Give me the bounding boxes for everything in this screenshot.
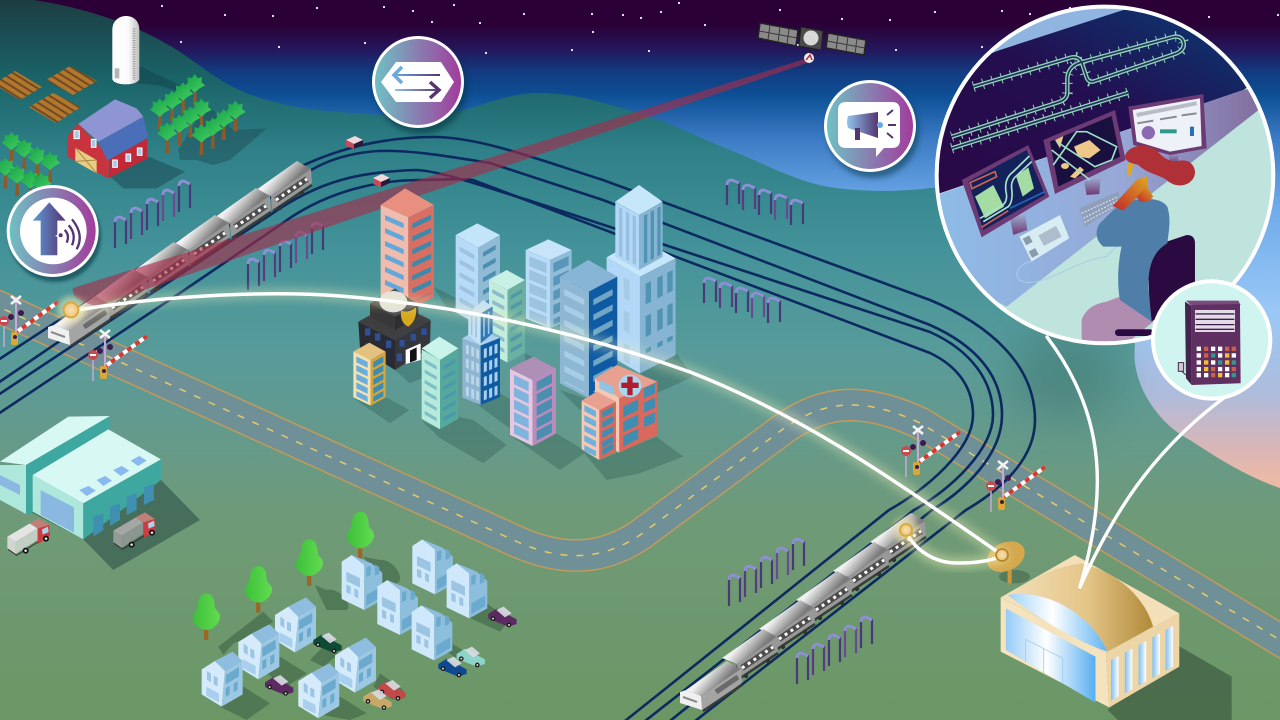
floor plane bbox=[1007, 306, 1008, 307]
monitor: centre bbox=[1043, 110, 1126, 194]
magnifier ring bbox=[937, 7, 1273, 343]
police station bbox=[358, 288, 431, 370]
building: mint front tower bbox=[422, 337, 458, 429]
building: small blue tower bbox=[462, 300, 500, 405]
warehouse front unit bbox=[33, 429, 161, 539]
building: large blue block bbox=[560, 260, 617, 398]
building: pale blue block bbox=[526, 239, 572, 328]
wall track diagram bbox=[952, 37, 1184, 148]
icon: data exchange badge bbox=[372, 36, 467, 134]
building: yellow tower bbox=[353, 343, 386, 406]
upper train bbox=[48, 161, 312, 346]
icon: satellite bbox=[758, 23, 866, 63]
wall panel bbox=[938, 10, 1247, 194]
building body bbox=[1001, 555, 1179, 707]
control room magnifier bbox=[930, 0, 1280, 399]
farm fields bbox=[0, 66, 97, 123]
icon: upload signal badge bbox=[7, 185, 101, 282]
level crossings bbox=[0, 296, 1045, 512]
rail cars in distance bbox=[346, 136, 390, 187]
rail tracks bbox=[0, 137, 1035, 720]
truck: white bbox=[7, 518, 50, 555]
room floor bbox=[940, 88, 1262, 322]
icon: silo bbox=[112, 16, 139, 84]
warehouse with trucks bbox=[0, 416, 200, 570]
barn bbox=[67, 99, 148, 178]
keyboards bbox=[1019, 192, 1122, 262]
road bbox=[0, 303, 1280, 646]
monitor: left bbox=[962, 145, 1049, 237]
building: salmon tower bbox=[381, 188, 434, 309]
control building bbox=[981, 535, 1232, 720]
darker hillside below the magnifier bbox=[1010, 330, 1120, 420]
callout lines from control building bbox=[1047, 337, 1232, 587]
building: lavender tower bbox=[510, 357, 556, 446]
farm: silo, barn and trees bbox=[0, 16, 267, 203]
node: train two bbox=[893, 517, 919, 543]
monitor: right bbox=[1128, 94, 1207, 155]
ceiling bbox=[992, 8, 1126, 53]
tree and house shadows bbox=[218, 557, 510, 720]
building: tall skyscraper bbox=[607, 185, 676, 373]
hospital bbox=[582, 365, 657, 460]
icon: announcement badge bbox=[824, 80, 919, 178]
main signal line bbox=[72, 294, 1002, 563]
orchard bbox=[0, 74, 246, 203]
housing estate bbox=[193, 512, 517, 720]
lower train bbox=[680, 513, 926, 711]
houses bbox=[202, 539, 487, 718]
operator bbox=[1082, 146, 1195, 343]
node: dish bbox=[996, 549, 1008, 561]
orchard shadow bbox=[178, 103, 267, 165]
node: train one bbox=[57, 296, 85, 324]
catenary poles bbox=[115, 180, 872, 684]
parked cars bbox=[265, 607, 517, 710]
stars bbox=[161, 2, 1279, 54]
building: mint mid tower bbox=[489, 270, 525, 363]
silo shadow bbox=[133, 63, 187, 93]
warehouse rear unit bbox=[0, 416, 110, 514]
building: light blue tower bbox=[456, 223, 500, 325]
truck: grey bbox=[113, 512, 156, 549]
building shadow bbox=[1108, 647, 1232, 720]
monitor stands bbox=[1010, 150, 1178, 235]
satellite laser beam bbox=[73, 58, 810, 306]
trees bbox=[193, 512, 374, 640]
desk bbox=[940, 89, 1258, 306]
cable bbox=[1017, 247, 1117, 283]
warehouse shadow bbox=[0, 480, 200, 570]
icon: satellite dish bbox=[981, 535, 1030, 583]
equipment rack badge bbox=[1153, 281, 1270, 399]
city group bbox=[353, 185, 693, 480]
barn shadow bbox=[110, 157, 185, 188]
building shadows bbox=[353, 287, 693, 480]
